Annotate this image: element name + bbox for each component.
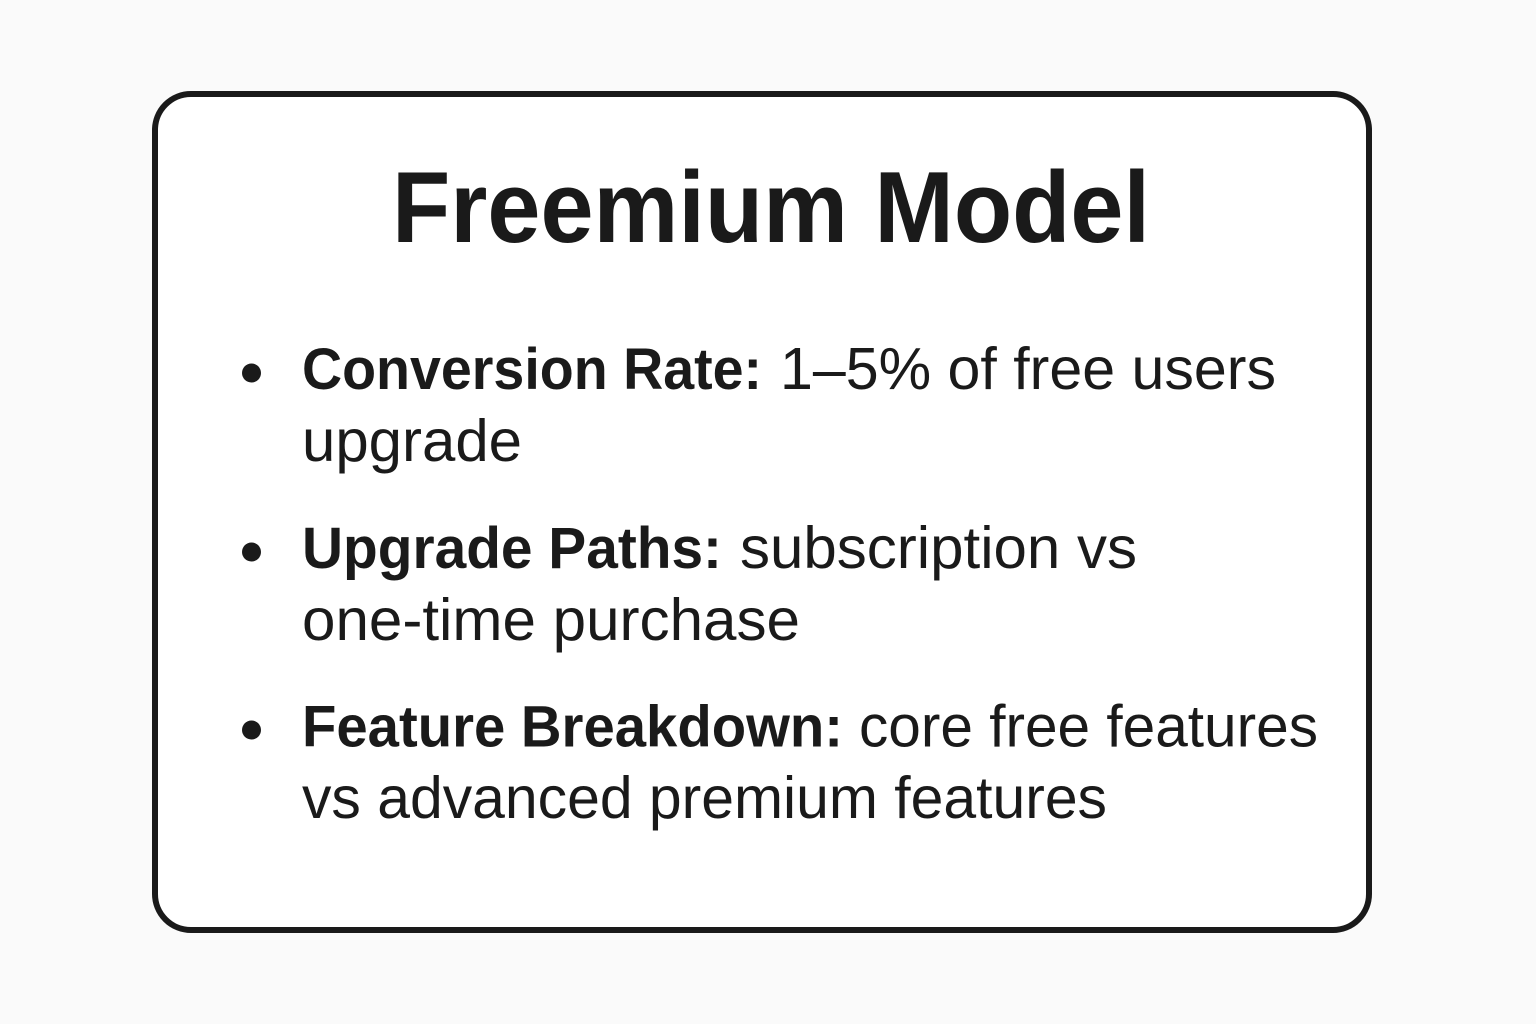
title: Freemium Model [392, 152, 1150, 264]
bullet item: feature breakdown: vs advanced premium features [302, 765, 1107, 831]
bullet item: conversion rate: upgrade [302, 408, 522, 474]
bullet item: conversion rate [242, 336, 1276, 474]
bullet item: feature breakdown [242, 694, 1318, 831]
bullet item: conversion rate: 1–5% of free users [780, 336, 1276, 402]
bullet item: feature breakdown: core free features [859, 694, 1318, 760]
bullet item: conversion rate: Conversion Rate: [302, 337, 762, 402]
panel: freemium model card [155, 94, 1369, 930]
bullet item: upgrade paths: one-time purchase [302, 587, 800, 653]
bullet item: upgrade paths [242, 515, 1137, 653]
bullet item: feature breakdown: Feature Breakdown: [302, 694, 843, 760]
bullet item: upgrade paths: subscription vs [740, 515, 1137, 581]
bullet item: upgrade paths: Upgrade Paths: [302, 516, 722, 581]
